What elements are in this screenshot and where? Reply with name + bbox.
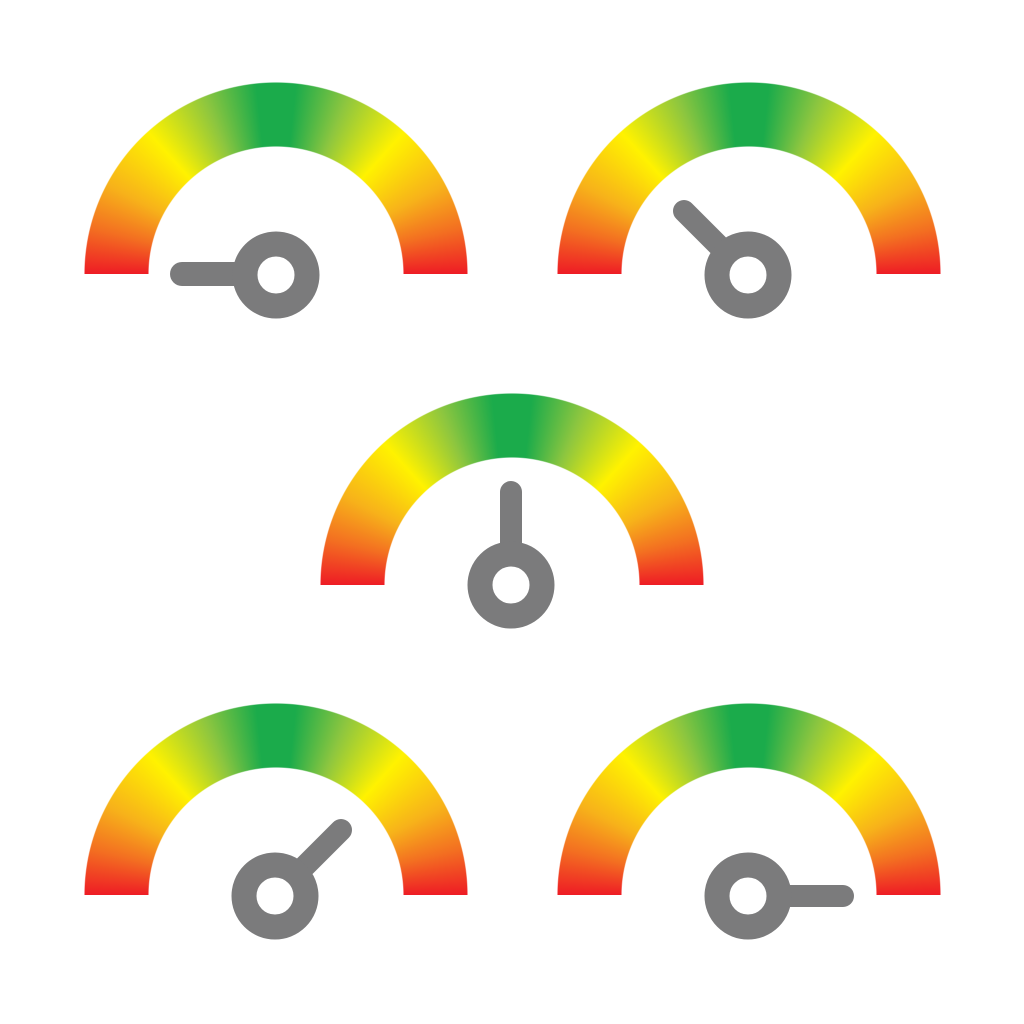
gauge 1 <box>84 82 468 274</box>
needle 5 <box>717 865 843 927</box>
gauge 5 <box>557 703 941 895</box>
gauge 3 <box>320 393 704 585</box>
needle 3 <box>480 492 542 616</box>
gauge 2 <box>557 82 941 274</box>
gauge 4 <box>84 703 468 895</box>
needle 1 <box>182 244 307 306</box>
needle 4 <box>244 830 341 927</box>
needle 2 <box>684 211 779 306</box>
